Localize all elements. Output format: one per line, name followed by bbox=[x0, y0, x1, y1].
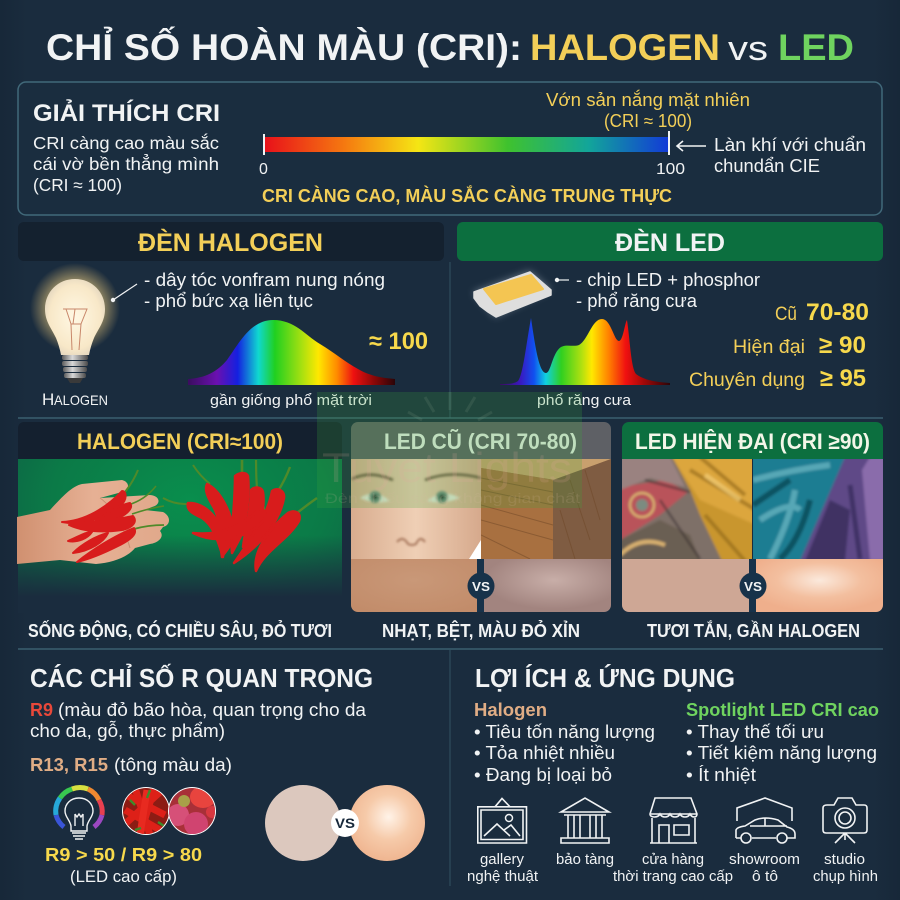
panel: modern LED comparison bbox=[620, 422, 885, 612]
labels: application places: nghệ thuật bbox=[467, 869, 538, 885]
text block: R13 R15 bbox=[30, 755, 232, 775]
text block: CRI description: (CRI ≈ 100) bbox=[33, 175, 122, 195]
chart: CRI colour scale bbox=[259, 131, 685, 178]
text block: LED features: - chip LED + phosphor bbox=[576, 270, 760, 290]
caption: LED spectrum: phổ răng cưa bbox=[537, 392, 632, 409]
icon: circle in gallery frame bbox=[506, 814, 512, 822]
value: halogen CRI: ≈ 100 bbox=[369, 328, 428, 355]
callout: higher CRI more faithful colour: CRI CÀNG CAO, MÀU SẮC CÀNG TRUNG THỰC bbox=[262, 185, 672, 206]
heading: CRI explanation: GIẢI THÍCH CRI bbox=[33, 98, 220, 127]
panel: LED header bbox=[457, 222, 883, 261]
text block: LED features bbox=[576, 270, 760, 311]
text block: R13 R15: R13, R15 bbox=[30, 755, 108, 775]
list: spotlight LED: • Thay thế tối ưu bbox=[686, 721, 824, 742]
text block: LED features: - phổ răng cưa bbox=[576, 291, 698, 311]
list: halogen: Halogen bbox=[474, 699, 547, 720]
icon: store bbox=[650, 798, 697, 843]
title bbox=[46, 26, 854, 68]
panel: halogen comparison bbox=[17, 422, 342, 613]
labels: application places bbox=[467, 852, 878, 885]
image: chili and berries bbox=[122, 787, 216, 835]
label: natural sunlight reference: Vớn sản nắng mặt nhiên bbox=[546, 89, 750, 110]
swatch: skin under modern LED bbox=[622, 559, 749, 612]
icon: museum bbox=[561, 798, 609, 843]
watermark bbox=[317, 392, 582, 508]
panel: benefits and applications bbox=[467, 663, 879, 885]
labels: application places: thời trang cao cấp bbox=[613, 869, 733, 885]
icon: RGB bulb bbox=[56, 788, 102, 839]
label: halogen bulb: ALOGEN bbox=[54, 392, 108, 408]
icon: gallery bbox=[478, 798, 526, 843]
list: LED CRI levels: Cũ bbox=[775, 304, 797, 325]
chart: halogen spectrum bbox=[188, 320, 395, 385]
list: LED CRI levels: Chuyên dụng bbox=[689, 370, 805, 391]
labels: application places: ô tô bbox=[752, 869, 778, 885]
panel: LED header: ĐÈN LED bbox=[615, 228, 725, 257]
text block: R9: R9 bbox=[30, 700, 53, 720]
list: LED CRI levels: 70-80 bbox=[806, 299, 869, 326]
icon: halogen bulb bbox=[30, 263, 120, 383]
panel: important R indices bbox=[30, 663, 425, 886]
text block: halogen features: - phổ bức xạ liên tục bbox=[144, 291, 313, 311]
caption: modern LED: TƯƠI TẮN, GẦN HALOGEN bbox=[647, 620, 860, 641]
title: LED bbox=[778, 27, 854, 68]
heading: modern LED: LED HIỆN ĐẠI (CRI ≥90) bbox=[635, 429, 870, 454]
list: halogen: • Tỏa nhiệt nhiều bbox=[474, 742, 615, 763]
icon: car wheels bbox=[741, 833, 787, 843]
title: CHỈ SỐ HOÀN MÀU (CRI): bbox=[46, 26, 522, 68]
list: spotlight LED: Spotlight LED CRI cao bbox=[686, 699, 879, 720]
label: halogen bulb bbox=[42, 390, 108, 409]
watermark: Tuyet Lights bbox=[322, 444, 572, 491]
list: LED CRI levels: ≥ 90 bbox=[819, 332, 866, 359]
text block: CIE reference: chundẩn CIE bbox=[714, 156, 820, 176]
heading: R indices: CÁC CHỈ SỐ R QUAN TRỌNG bbox=[30, 663, 373, 693]
image: wood block bbox=[481, 459, 611, 559]
text block: R9: (màu đỏ bão hòa, quan trọng cho da bbox=[58, 700, 367, 720]
badge: vs bbox=[740, 559, 766, 612]
badge: vs bbox=[468, 559, 494, 612]
chart: CRI colour scale: 0 bbox=[259, 161, 268, 178]
image: hand holding chili bbox=[17, 470, 169, 564]
text block: CRI description: cái vờ bền thẳng mình bbox=[33, 153, 219, 174]
caption: premium LED: (LED cao cấp) bbox=[70, 868, 177, 886]
list: LED CRI levels: ≥ 95 bbox=[820, 365, 866, 392]
list: spotlight LED: • Ít nhiệt bbox=[686, 764, 756, 785]
badge: vs: VS bbox=[472, 579, 490, 594]
panel: halogen header: ĐÈN HALOGEN bbox=[138, 228, 323, 257]
label: halogen bulb: H bbox=[42, 390, 54, 409]
title: vs bbox=[728, 30, 768, 68]
panel: old LED comparison bbox=[351, 422, 611, 612]
heading: halogen comparison: HALOGEN (CRI≈100) bbox=[77, 429, 283, 454]
chart: skin tone comparison: VS bbox=[335, 816, 355, 831]
list: halogen: • Tiêu tốn năng lượng bbox=[474, 721, 655, 742]
caption: old LED: NHẠT, BỆT, MÀU ĐỎ XỈN bbox=[382, 620, 580, 641]
icon: car showroom bbox=[736, 798, 795, 838]
image: patterned and gold fabric bbox=[620, 457, 756, 561]
heading: old LED: LED CŨ (CRI 70-80) bbox=[384, 429, 577, 454]
swatch: pink tone under old LED bbox=[484, 559, 611, 612]
list: halogen: • Đang bị loại bỏ bbox=[474, 764, 612, 785]
arrow: bulb pointer bbox=[111, 284, 137, 302]
panel: halogen header bbox=[18, 222, 444, 261]
swatch: skin under old LED bbox=[351, 559, 477, 612]
chart: skin tone comparison bbox=[265, 785, 425, 861]
watermark: Đèn chiếu sáng không gian chất bbox=[325, 490, 580, 506]
label: natural sunlight reference: (CRI ≈ 100) bbox=[604, 111, 692, 131]
label: natural sunlight reference bbox=[546, 89, 750, 131]
text block: CIE reference: Làn khí với chuẩn bbox=[714, 135, 866, 155]
text block: R9 bbox=[30, 700, 367, 741]
list: spotlight LED bbox=[686, 699, 879, 785]
text block: halogen features: - dây tóc vonfram nung nóng bbox=[144, 270, 385, 290]
labels: application places: cửa hàng bbox=[642, 852, 704, 868]
image: face under old LED bbox=[351, 459, 481, 559]
caption: halogen comparison: SỐNG ĐỘNG, CÓ CHIỀU SÂU, ĐỎ TƯƠI bbox=[28, 620, 332, 641]
image: chili peppers bbox=[163, 460, 317, 571]
list: halogen bbox=[474, 699, 655, 785]
chart: LED spectrum bbox=[500, 318, 670, 385]
labels: application places: studio bbox=[824, 852, 865, 868]
text block: CRI description bbox=[33, 132, 219, 195]
panel: CRI explanation bbox=[18, 82, 882, 215]
chart: CRI colour scale: 100 bbox=[656, 161, 685, 178]
list: spotlight LED: • Tiết kiệm năng lượng bbox=[686, 742, 877, 763]
caption: halogen spectrum: gần giống phổ mặt trời bbox=[210, 392, 372, 409]
text block: R13 R15: (tông màu da) bbox=[114, 755, 232, 775]
icon: camera lens bbox=[835, 808, 855, 828]
text block: halogen features bbox=[144, 270, 385, 311]
title: HALOGEN bbox=[530, 27, 720, 68]
value: R9 thresholds: R9 > 50 / R9 > 80 bbox=[45, 845, 202, 865]
list: LED CRI levels bbox=[689, 299, 869, 392]
labels: application places: showroom bbox=[729, 852, 800, 868]
image: teal and purple satin bbox=[751, 457, 885, 561]
arrow: pointing to CRI 100 bbox=[677, 141, 706, 151]
heading: benefits: LỢI ÍCH & ỨNG DỤNG bbox=[475, 663, 735, 693]
labels: application places: chụp hình bbox=[813, 869, 878, 885]
text block: CRI description: CRI càng cao màu sắc bbox=[33, 132, 219, 153]
labels: application places: bảo tàng bbox=[556, 852, 614, 868]
icon: studio camera bbox=[823, 798, 867, 843]
text block: CIE reference bbox=[714, 135, 866, 176]
text block: R9: cho da, gỗ, thực phẩm) bbox=[30, 720, 225, 741]
badge: vs: VS bbox=[744, 579, 762, 594]
labels: application places: gallery bbox=[480, 852, 525, 868]
swatch: skin under halogen reference bbox=[756, 559, 883, 612]
icon: LED chip bbox=[473, 271, 551, 317]
arrow: chip pointer bbox=[555, 278, 569, 282]
list: LED CRI levels: Hiện đại bbox=[733, 337, 805, 358]
